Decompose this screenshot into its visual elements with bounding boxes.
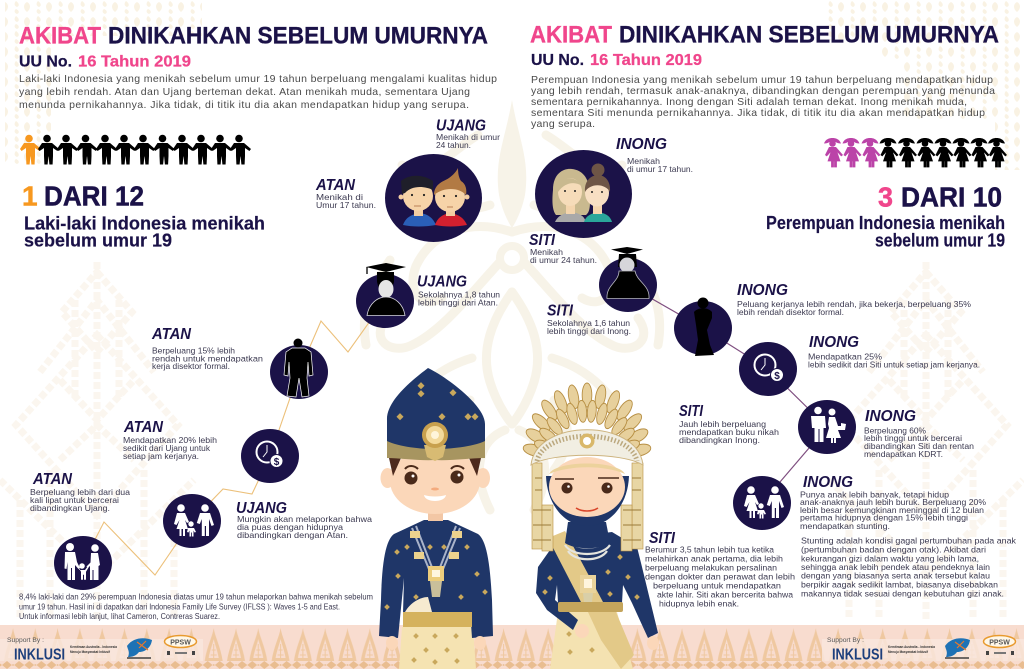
label: Atan wages: setiap jam kerjanya. xyxy=(123,451,199,461)
label: Atan wages: Mendapatkan 20% lebih xyxy=(123,435,217,445)
label: Siti life: melahirkan anak pertama, dia lebih xyxy=(645,554,783,564)
label: Atan divorce: Berpeluang lebih dari dua xyxy=(30,487,130,497)
label: Atan wages: ATAN xyxy=(123,419,164,436)
text: stunting definition: (pertumbuhan badan dengan otak). Akibat dari xyxy=(801,544,986,554)
left stat: 1 dari 12: Laki-laki Indonesia menikah xyxy=(24,214,265,234)
label: Inong divorce: lebih tinggi untuk bercerai xyxy=(864,433,962,443)
icon: man in suit xyxy=(270,338,328,399)
right logos: Support By : xyxy=(827,637,864,644)
icon: clock and money right: $ xyxy=(774,371,780,382)
icon: clock and money left: $ xyxy=(274,457,280,468)
label: Atan formal work: rendah untuk mendapatkan xyxy=(152,354,263,364)
label: Siti life: akte lahir. Siti akan bercerita bahwa xyxy=(657,590,793,600)
text: stunting definition xyxy=(801,536,1017,598)
right logos: Menuju Masyarakat Inklusif xyxy=(888,650,929,654)
label: Inong wages: lebih sedikit dari Siti untuk setiap jam kerjanya. xyxy=(808,360,980,370)
label: Ujang education: UJANG xyxy=(417,274,467,290)
label: Atan married: Menikah di xyxy=(316,192,363,202)
label: Siti education: lebih tinggi dari Inong. xyxy=(547,326,631,336)
right stat: 3 dari 10: 3 xyxy=(878,182,893,212)
icon: graduate woman xyxy=(599,247,657,312)
right heading: AKIBAT xyxy=(530,22,612,48)
label: Siti marriage book: dibandingkan Inong. xyxy=(679,435,760,445)
label: Inong children: INONG xyxy=(803,474,853,491)
label: Atan formal work xyxy=(151,326,263,371)
right heading: 16 Tahun 2019 xyxy=(590,52,702,69)
left heading: 16 Tahun 2019 xyxy=(78,54,191,70)
figure: groom in traditional dress xyxy=(379,368,493,669)
label: Siti married xyxy=(529,232,597,265)
pictogram: 3 of 10 girls xyxy=(824,138,1007,167)
left logos: Menuju Masyarakat Inklusif xyxy=(70,650,111,654)
label: Siti marriage book: Jauh lebih berpeluang xyxy=(679,419,766,429)
left intro text: yang lebih rendah. Atan dan Ujang berteman dekat. Atan menikah muda, sementara Ujang xyxy=(19,86,470,98)
right heading xyxy=(530,22,999,69)
label: Ujang married xyxy=(436,118,500,150)
label: Siti marriage book xyxy=(679,403,779,445)
icon: two women portrait xyxy=(535,150,632,238)
label: Siti life xyxy=(645,530,795,608)
right logos: PPSW xyxy=(989,640,1010,646)
label: Siti life: Berumur 3,5 tahun lebih tua ketika xyxy=(645,544,774,554)
right logos xyxy=(827,636,1016,664)
icon: wedding couple xyxy=(798,400,856,454)
footnote: umur 19 tahun. Hasil ini di dapatkan dari Indonesia Family Life Survey (IFLSS ): Waves 1-5 and East. xyxy=(19,602,340,612)
figure: bride in traditional dress xyxy=(522,383,659,669)
footer band xyxy=(0,625,1024,669)
connector line: left path xyxy=(83,300,385,575)
left logos: INKLUSI xyxy=(14,646,65,664)
icon: two boys portrait xyxy=(385,154,482,242)
right stat: 3 dari 10 xyxy=(766,182,1005,250)
label: Inong married: INONG xyxy=(616,136,667,153)
left logos: PPSW xyxy=(170,640,191,646)
label: Siti life: berpeluang melakukan persalinan xyxy=(645,562,777,572)
right stat: 3 dari 10: Perempuan Indonesia menikah xyxy=(766,213,1005,233)
label: Inong children: Punya anak lebih banyak, tetapi hidup xyxy=(800,490,949,500)
connector line: right path xyxy=(628,285,827,503)
label: Inong divorce: mendapatkan KDRT. xyxy=(864,449,943,459)
label: Siti life: dengan dokter dan perawat dan lebih xyxy=(645,572,795,582)
label: Ujang married: 24 tahun. xyxy=(436,140,471,150)
label: Atan divorce xyxy=(30,471,130,513)
label: Atan wages xyxy=(123,419,217,461)
right logos: INKLUSI xyxy=(832,646,883,664)
right intro text xyxy=(531,74,995,130)
label: Atan married xyxy=(315,177,376,210)
icon: graduate man xyxy=(356,263,414,328)
right logos: Kemitraan Australia - Indonesia xyxy=(888,645,935,649)
footnote: 8,4% laki-laki dan 29% perempuan Indonesia diatas umur 19 tahun melaporkan bahwa menikah sebelum xyxy=(19,592,373,602)
label: Ujang satisfaction: UJANG xyxy=(236,500,287,517)
left heading: UU No. xyxy=(19,54,72,70)
label: Inong formal work: INONG xyxy=(737,282,788,299)
icon: family left xyxy=(163,494,221,548)
left logos: Support By : xyxy=(7,637,44,644)
label: Ujang education: Sekolahnya 1,8 tahun xyxy=(418,290,500,300)
left heading: AKIBAT xyxy=(19,22,101,50)
left heading: DINIKAHKAN SEBELUM UMURNYA xyxy=(108,22,488,50)
label: Inong divorce: Berpeluang 60% xyxy=(864,426,926,436)
footnote xyxy=(19,592,373,621)
label: Inong children: anak-anaknya jauh lebih buruk. Berpeluang 20% xyxy=(800,497,986,507)
left intro text xyxy=(19,73,497,111)
label: Atan formal work: Berpeluang 15% lebih xyxy=(152,346,235,356)
text: stunting definition: sehingga anak lebih pendek atau pendeknya lain xyxy=(801,562,990,572)
label: Atan divorce: dibandingkan Ujang. xyxy=(30,503,110,513)
left logos: Kemitraan Australia - Indonesia xyxy=(70,645,117,649)
right heading: UU No. xyxy=(531,52,584,69)
left intro text: menunda pernikahannya. Jika tidak, di titik itu dia akan mendapatkan hidup yang serupa. xyxy=(19,99,469,111)
left logos xyxy=(7,636,196,664)
icon: woman silhouette xyxy=(674,298,732,356)
label: Ujang married: UJANG xyxy=(436,118,486,134)
label: Ujang satisfaction: dia puas dengan hidupnya xyxy=(237,522,343,532)
label: Siti education: SITI xyxy=(547,302,574,320)
left stat: 1 dari 12: 1 xyxy=(22,180,38,212)
label: Ujang education: lebih tinggi dari Atan. xyxy=(418,298,498,308)
right stat: 3 dari 10: sebelum umur 19 xyxy=(875,230,1005,250)
label: Ujang satisfaction: Mungkin akan melaporkan bahwa xyxy=(237,514,372,524)
label: Siti education: Sekolahnya 1,6 tahun xyxy=(547,318,630,328)
label: Inong divorce xyxy=(864,408,974,459)
label: Inong wages: INONG xyxy=(809,334,859,351)
label: Siti married: SITI xyxy=(529,232,556,249)
left stat: 1 dari 12: DARI 12 xyxy=(44,180,144,212)
text: stunting definition: dengan yang biasanya serta anak tersebut kalau xyxy=(801,570,990,580)
label: Inong children: mendapatkan stunting. xyxy=(800,521,890,531)
label: Atan wages: sedikit dari Ujang untuk xyxy=(123,443,211,453)
label: Inong formal work xyxy=(737,282,971,317)
icon: clock and money left xyxy=(241,429,299,483)
label: Inong married xyxy=(616,136,693,174)
footnote: Untuk informasi lebih lanjut, lihat Cameron, Contreras Suarez. xyxy=(19,611,220,621)
right intro text: sementara pernikahannya. Inong dengan Siti adalah teman dekat. Inong menikah muda, xyxy=(531,96,967,108)
label: Atan divorce: kali lipat untuk bercerai xyxy=(30,495,119,505)
left stat: 1 dari 12 xyxy=(22,180,265,250)
label: Atan married: Umur 17 tahun. xyxy=(316,200,376,210)
label: Atan formal work: ATAN xyxy=(151,326,192,343)
label: Inong married: Menikah xyxy=(627,156,660,166)
label: Siti life: SITI xyxy=(649,530,676,547)
label: Atan married: ATAN xyxy=(315,177,356,194)
label: Siti marriage book: SITI xyxy=(679,403,704,420)
label: Inong children: pertama hidupnya dengan 15% lebih tinggi xyxy=(800,512,968,522)
label: Siti married: Menikah xyxy=(530,247,563,257)
text: stunting definition: berpikir aagak sedikit lambat, biasanya disebabkan xyxy=(801,580,998,590)
icon: divorced family xyxy=(54,536,112,590)
label: Inong divorce: dibandingkan Siti dan rentan xyxy=(864,441,974,451)
right intro text: yang lebih rendah, termasuk anak-anaknya, dibandingkan dengan perempuan yang menunda xyxy=(531,85,995,97)
label: Inong married: di umur 17 tahun. xyxy=(627,164,693,174)
label: Inong divorce: INONG xyxy=(865,408,916,425)
text: stunting definition: Stunting adalah kondisi gagal pertumbuhan pada anak xyxy=(801,536,1017,546)
label: Siti life: berpeluang untuk mendapatkan xyxy=(653,580,781,590)
label: Siti marriage book: mendapatkan buku nikah xyxy=(679,427,779,437)
label: Ujang married: Menikah di umur xyxy=(436,132,500,142)
text: stunting definition: kekurangan gizi dalam waktu yang lebih lama, xyxy=(801,554,979,564)
label: Inong formal work: lebih rendah disektor formal. xyxy=(737,307,844,317)
text: stunting definition: makannya tidak sesuai dengan kebutuhan gizi anak. xyxy=(801,588,1004,598)
label: Inong wages xyxy=(808,334,980,370)
label: Siti life: hidupnya lebih enak. xyxy=(659,598,739,608)
right stat: 3 dari 10: DARI 10 xyxy=(901,182,1002,212)
left intro text: Laki-laki Indonesia yang menikah sebelum umur 19 tahun berpeluang mengalami kualitas hidup xyxy=(19,73,497,85)
label: Ujang education xyxy=(417,274,500,308)
label: Inong formal work: Peluang kerjanya lebih rendah, jika bekerja, berpeluang 35% xyxy=(737,299,971,309)
icon: clock and money right xyxy=(739,342,797,396)
right intro text: sementara Siti menunda pernikahannya. Jika tidak, di titik itu dia akan mendapatkan hidup xyxy=(531,107,985,119)
label: Siti education xyxy=(547,302,631,336)
label: Inong children xyxy=(800,474,986,531)
label: Ujang satisfaction xyxy=(236,500,372,540)
right intro text: Perempuan Indonesia yang menikah sebelum umur 19 tahun berpeluang mendapatkan hidup xyxy=(531,74,993,86)
pictogram: 1 of 12 boys xyxy=(20,135,251,164)
label: Inong children: lebih besar kemungkinan meninggal di 12 bulan xyxy=(800,505,984,515)
left heading xyxy=(19,22,488,70)
label: Atan divorce: ATAN xyxy=(32,471,73,488)
label: Atan formal work: kerja disektor formal. xyxy=(152,361,230,371)
label: Siti married: di umur 24 tahun. xyxy=(530,255,597,265)
icon: family right xyxy=(733,476,791,530)
right intro text: yang serupa. xyxy=(531,118,595,130)
label: Ujang satisfaction: dibandingkan dengan Atan. xyxy=(237,530,348,540)
right heading: DINIKAHKAN SEBELUM UMURNYA xyxy=(619,22,999,48)
left stat: 1 dari 12: sebelum umur 19 xyxy=(24,230,172,250)
label: Inong wages: Mendapatkan 25% xyxy=(808,352,882,362)
